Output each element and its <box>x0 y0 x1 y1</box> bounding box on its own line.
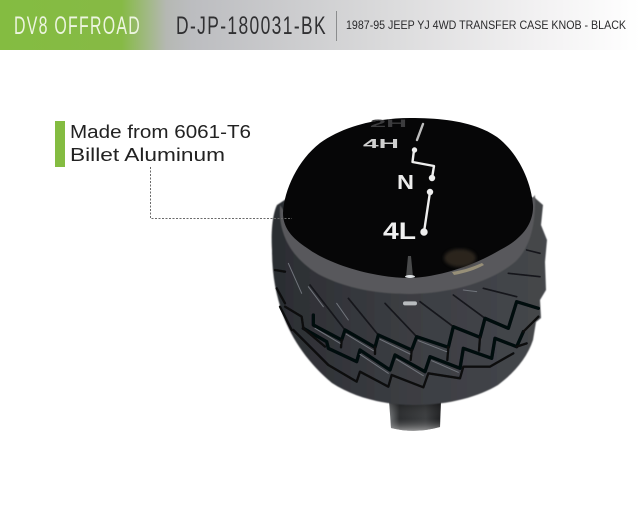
range label N: N <box>397 172 414 194</box>
product description: 1987-95 JEEP YJ 4WD TRANSFER CASE KNOB - BLACK <box>346 20 626 32</box>
range label 4H: 4H <box>363 137 399 151</box>
callout accent bar <box>55 121 65 167</box>
callout text: Billet Aluminum <box>70 145 225 165</box>
tread highlights <box>288 263 477 376</box>
part number: D-JP-180031-BK <box>176 12 327 40</box>
knob base and tire body <box>272 190 547 405</box>
callout text: Made from 6061-T6 <box>70 122 251 142</box>
main tread grooves <box>303 302 538 372</box>
header divider <box>336 11 337 41</box>
tire tread <box>275 250 540 387</box>
black aluminum dome top <box>283 118 533 278</box>
dome rim <box>280 195 535 294</box>
product image: transfer case knob <box>272 118 547 431</box>
range label 4L: 4L <box>383 218 416 245</box>
shift pattern lines <box>412 124 434 234</box>
knob stem <box>389 400 441 431</box>
brand name: DV8 OFFROAD <box>14 12 141 40</box>
lower tread grooves <box>275 270 538 387</box>
callout text <box>70 122 251 165</box>
upper diagonal grooves <box>310 250 540 337</box>
dome reflections <box>405 249 484 278</box>
dotted leader line <box>150 167 292 218</box>
header banner <box>0 0 640 50</box>
callout: billet aluminum <box>55 121 292 218</box>
range label 2H: 2H <box>370 118 407 130</box>
